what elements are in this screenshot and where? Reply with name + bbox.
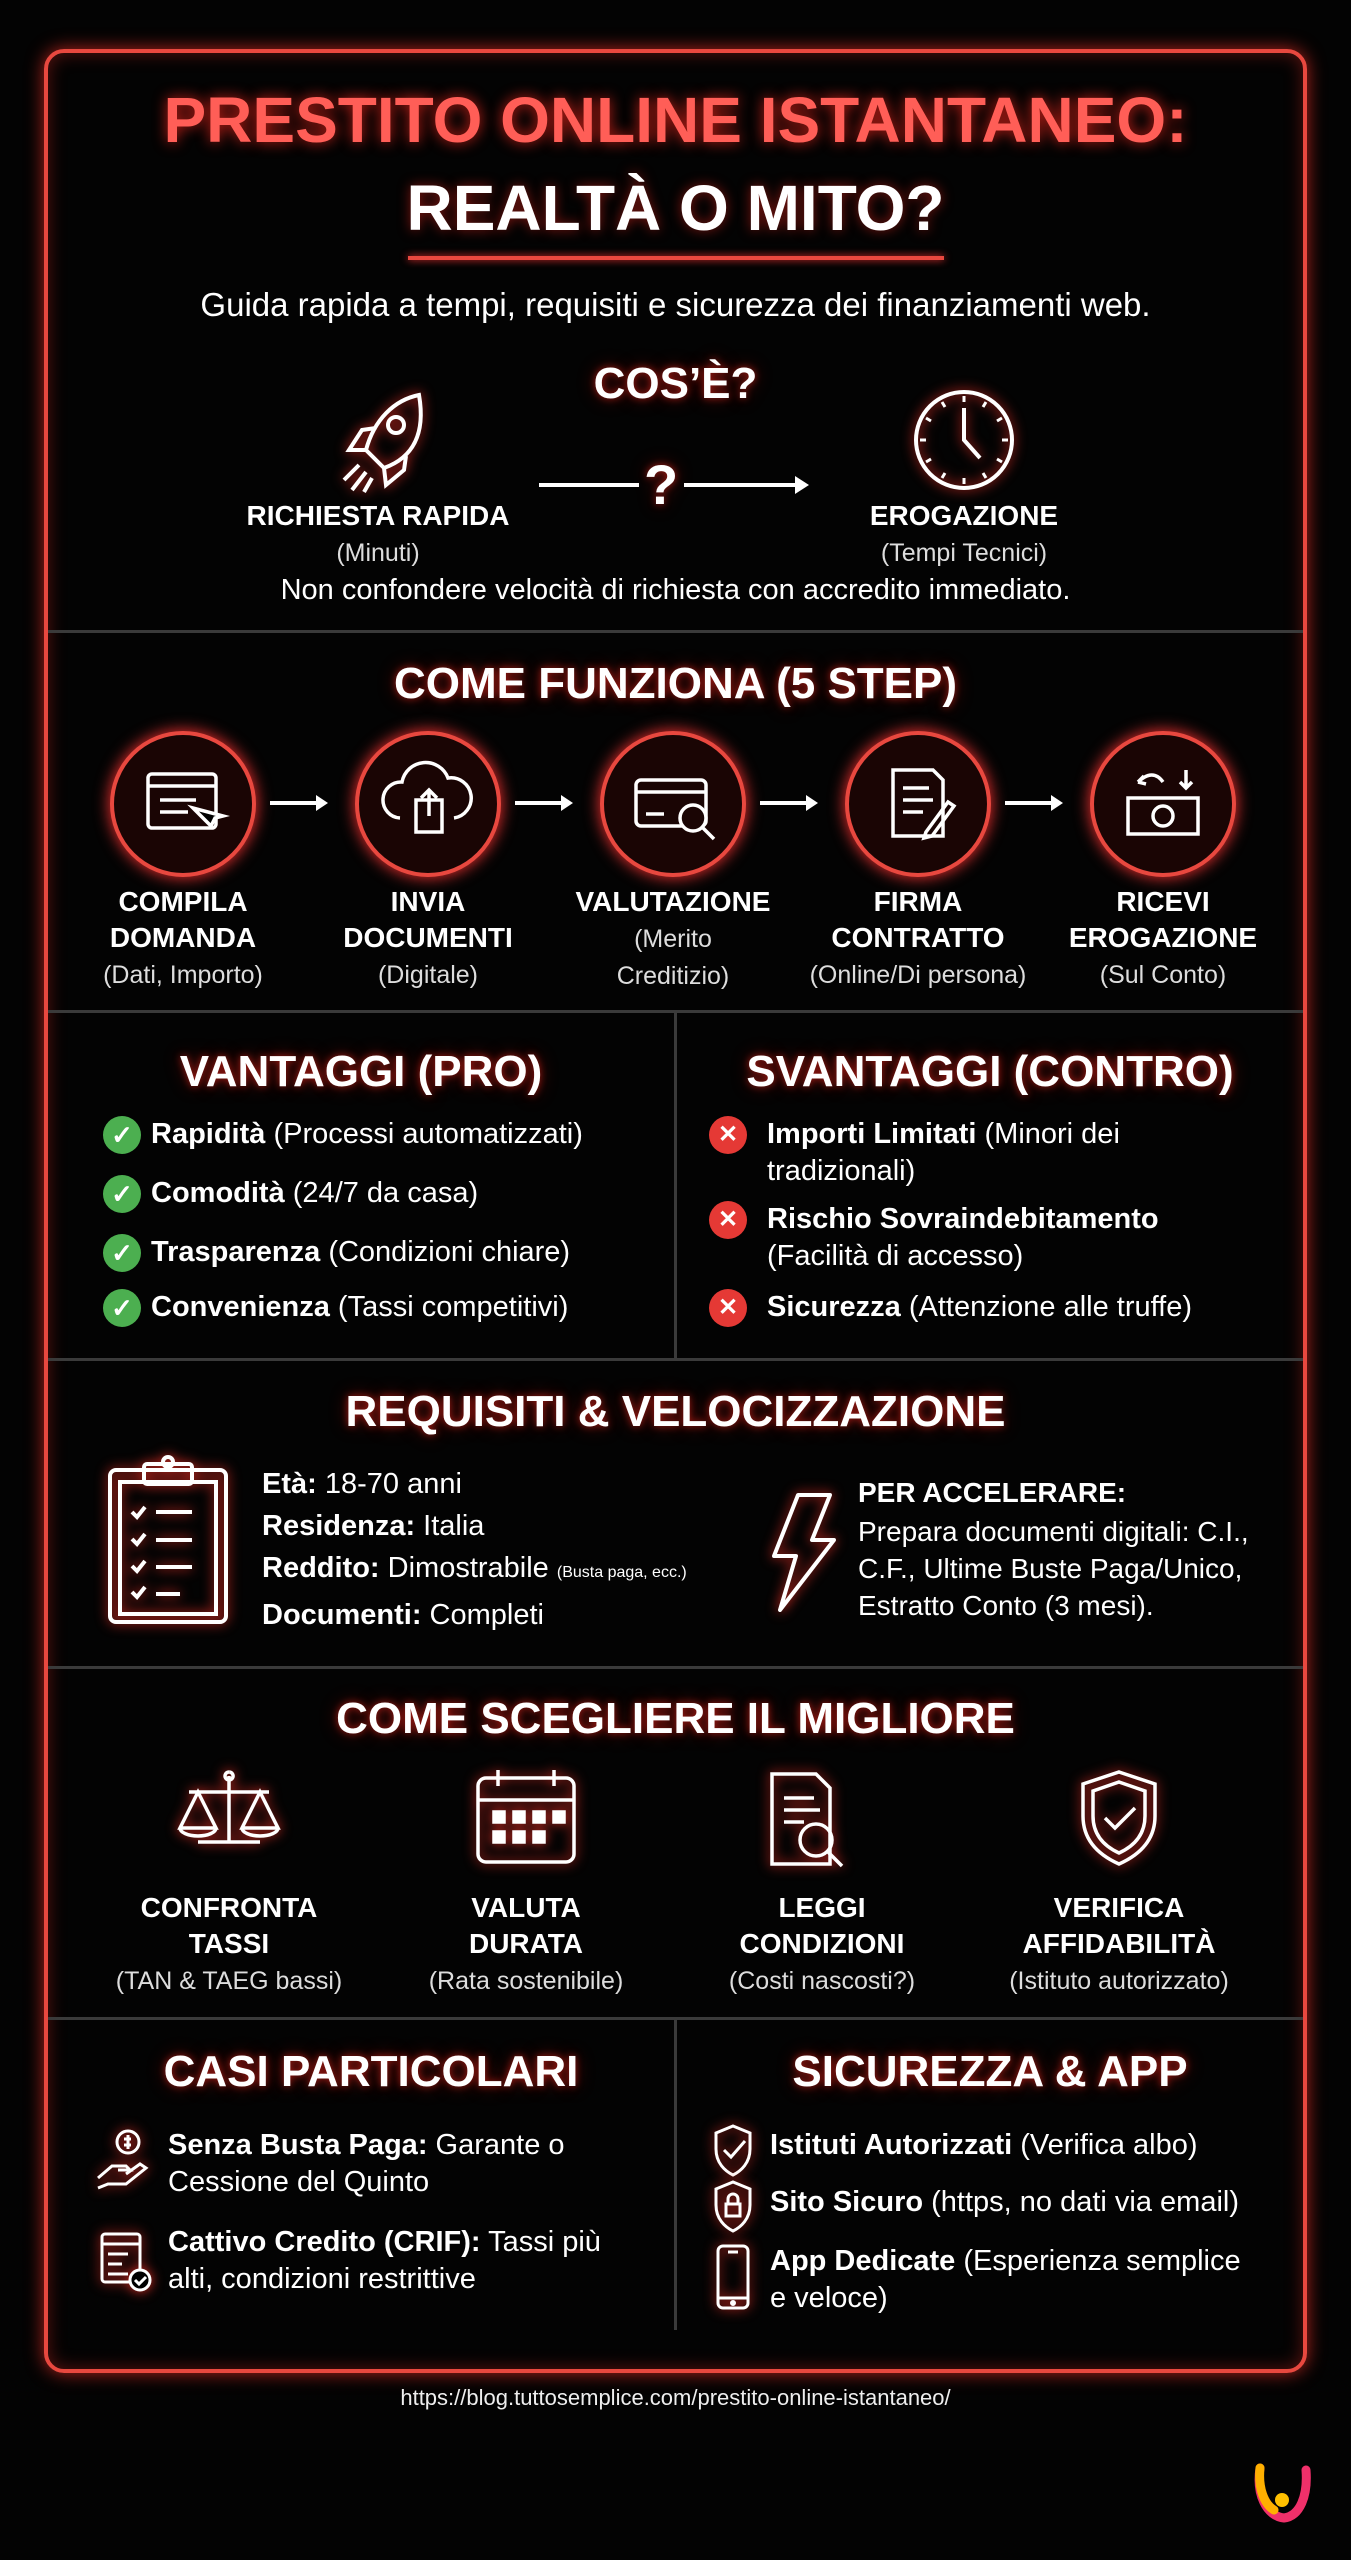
icon: credit doc <box>91 2223 160 2300</box>
casi item 1: Senza Busta Paga: Garante o <box>168 2129 565 2161</box>
heading: vantaggi: VANTAGGI (PRO) <box>180 1047 542 1096</box>
section: come funziona: VALUTAZIONE <box>576 886 770 917</box>
icon: phone <box>707 2236 759 2319</box>
per accelerare: PER ACCELERARE: <box>858 1477 1126 1508</box>
panel: sicurezza: Istituti Autorizzati (Verifica albo) <box>770 2129 1198 2161</box>
panel: sicurezza <box>705 2047 1241 2319</box>
logo <box>1254 2464 1311 2522</box>
label: richiesta rapida <box>247 500 509 567</box>
label: erogazione: EROGAZIONE <box>870 500 1058 531</box>
section: come scegliere: DURATA <box>469 1928 583 1959</box>
label: erogazione <box>870 500 1058 567</box>
icon: rocket <box>337 385 432 499</box>
pro list: ✓ <box>111 1293 133 1323</box>
heading: come scegliere: COME SCEGLIERE IL MIGLIORE <box>336 1694 1015 1743</box>
section: cos'è <box>247 353 1070 606</box>
panel: vantaggi <box>103 1047 583 1327</box>
pro list: ✓ <box>111 1179 133 1209</box>
pro list: ✓ <box>111 1238 133 1268</box>
pro list: Trasparenza (Condizioni chiare) <box>151 1236 570 1268</box>
requisiti list: Documenti: Completi <box>262 1599 544 1631</box>
per accelerare: Estratto Conto (3 mesi). <box>858 1590 1154 1621</box>
casi item 2: Cattivo Credito (CRIF): Tassi più <box>168 2226 601 2258</box>
section: come funziona: (Merito <box>634 925 712 953</box>
requisiti list <box>262 1468 687 1631</box>
heading: requisiti: REQUISITI & VELOCIZZAZIONE <box>345 1387 1006 1436</box>
requisiti list: Età: 18-70 anni <box>262 1468 462 1500</box>
section: come scegliere <box>116 1694 1229 1995</box>
pro list <box>103 1116 583 1327</box>
panel: sicurezza: Sito Sicuro (https, no dati via email) <box>770 2186 1239 2218</box>
title: REALTÀ O MITO? <box>406 172 945 244</box>
icon: shield lock <box>705 2173 761 2240</box>
heading: svantaggi: SVANTAGGI (CONTRO) <box>746 1047 1234 1096</box>
contro list: Rischio Sovraindebitamento <box>767 1203 1159 1235</box>
step labels <box>103 886 263 989</box>
icon: shield check <box>705 2116 761 2182</box>
choose labels: TASSI <box>189 1928 269 1959</box>
casi item 2: alti, condizioni restrittive <box>168 2263 476 2295</box>
footer url: https://blog.tuttosemplice.com/prestito-online-istantaneo/ <box>400 2385 951 2410</box>
per accelerare: Prepara documenti digitali: C.I., <box>858 1516 1249 1547</box>
section: come scegliere: (Costi nascosti?) <box>729 1967 915 1995</box>
section: requisiti <box>98 1387 1249 1634</box>
section: come scegliere: AFFIDABILITÀ <box>1023 1928 1215 1959</box>
choose icons <box>170 1762 1166 1876</box>
label: richiesta rapida: RICHIESTA RAPIDA <box>247 500 509 531</box>
pro list: ✓ <box>111 1120 133 1150</box>
icon: lightning <box>764 1483 843 1618</box>
pro list: Convenienza (Tassi competitivi) <box>151 1291 568 1323</box>
step labels: (Dati, Importo) <box>103 961 263 989</box>
pro list: Rapidità (Processi automatizzati) <box>151 1118 583 1150</box>
icon: clock <box>904 380 1024 500</box>
icon: hand money <box>92 2121 154 2196</box>
per accelerare: C.F., Ultime Buste Paga/Unico, <box>858 1553 1242 1584</box>
heading: cos'è: COS’È? <box>594 359 757 408</box>
section: come funziona: FIRMA <box>874 886 962 917</box>
choose labels <box>116 1892 342 1995</box>
requisiti list: Residenza: Italia <box>262 1510 484 1542</box>
section: come scegliere: (Rata sostenibile) <box>429 1967 623 1995</box>
section: come funziona: RICEVI <box>1116 886 1210 917</box>
section: come funziona: Creditizio) <box>617 962 729 990</box>
section: come scegliere: VALUTA <box>471 1892 581 1923</box>
section: come scegliere: CONDIZIONI <box>740 1928 904 1959</box>
icon: clipboard <box>98 1447 238 1634</box>
casi item 1: Cessione del Quinto <box>168 2166 429 2198</box>
casi item 1 <box>168 2129 565 2198</box>
title <box>156 84 1190 244</box>
step labels: COMPILA <box>118 886 248 917</box>
title: PRESTITO ONLINE ISTANTANEO: <box>163 84 1188 156</box>
section: come funziona: CONTRATTO <box>831 922 1005 953</box>
choose labels: CONFRONTA <box>141 1892 317 1923</box>
section: come scegliere: (Istituto autorizzato) <box>1009 1967 1229 1995</box>
choose labels: (TAN & TAEG bassi) <box>116 1967 342 1995</box>
contro list: Sicurezza (Attenzione alle truffe) <box>767 1291 1192 1323</box>
contro list: (Facilità di accesso) <box>767 1240 1023 1272</box>
label: richiesta rapida: (Minuti) <box>336 539 420 567</box>
section: come funziona: (Sul Conto) <box>1100 961 1226 989</box>
subtitle: Guida rapida a tempi, requisiti e sicurezza dei finanziamenti web. <box>200 286 1151 323</box>
contro list: tradizionali) <box>767 1155 915 1187</box>
heading: casi: CASI PARTICOLARI <box>164 2047 578 2096</box>
heading: come funziona: COME FUNZIONA (5 STEP) <box>394 659 957 708</box>
contro list: ✕ <box>718 1206 738 1233</box>
section: come funziona: (Online/Di persona) <box>810 961 1026 989</box>
section: come scegliere: VERIFICA <box>1054 1892 1184 1923</box>
panel: sicurezza: e veloce) <box>770 2282 888 2314</box>
arrow with question mark <box>539 453 809 516</box>
panel: casi particolari <box>91 2047 601 2300</box>
contro list: ✕ <box>718 1294 738 1321</box>
panel: svantaggi <box>709 1047 1240 1327</box>
pro list: Comodità (24/7 da casa) <box>151 1177 478 1209</box>
step labels: DOMANDA <box>110 922 256 953</box>
step icons <box>97 718 1249 890</box>
contro list <box>709 1116 1192 1327</box>
section: come scegliere: LEGGI <box>778 1892 866 1923</box>
section: come funziona: INVIA <box>391 886 465 917</box>
panel: sicurezza: App Dedicate (Esperienza semplice <box>770 2245 1241 2277</box>
requisiti list: Reddito: Dimostrabile (Busta paga, ecc.) <box>262 1552 687 1584</box>
per accelerare <box>858 1477 1249 1621</box>
contro list: Importi Limitati (Minori dei <box>767 1118 1120 1150</box>
section: come funziona: DOCUMENTI <box>343 922 513 953</box>
section: come funziona: EROGAZIONE <box>1069 922 1257 953</box>
label: erogazione: (Tempi Tecnici) <box>881 539 1047 567</box>
casi item 2 <box>168 2226 601 2295</box>
section: come funziona: (Digitale) <box>378 961 478 989</box>
note: Non confondere velocità di richiesta con accredito immediato. <box>281 574 1070 606</box>
contro list: ✕ <box>718 1121 738 1148</box>
arrow with question mark: ? <box>644 453 678 516</box>
section: come funziona <box>97 659 1257 990</box>
heading: sicurezza: SICUREZZA & APP <box>792 2047 1188 2096</box>
